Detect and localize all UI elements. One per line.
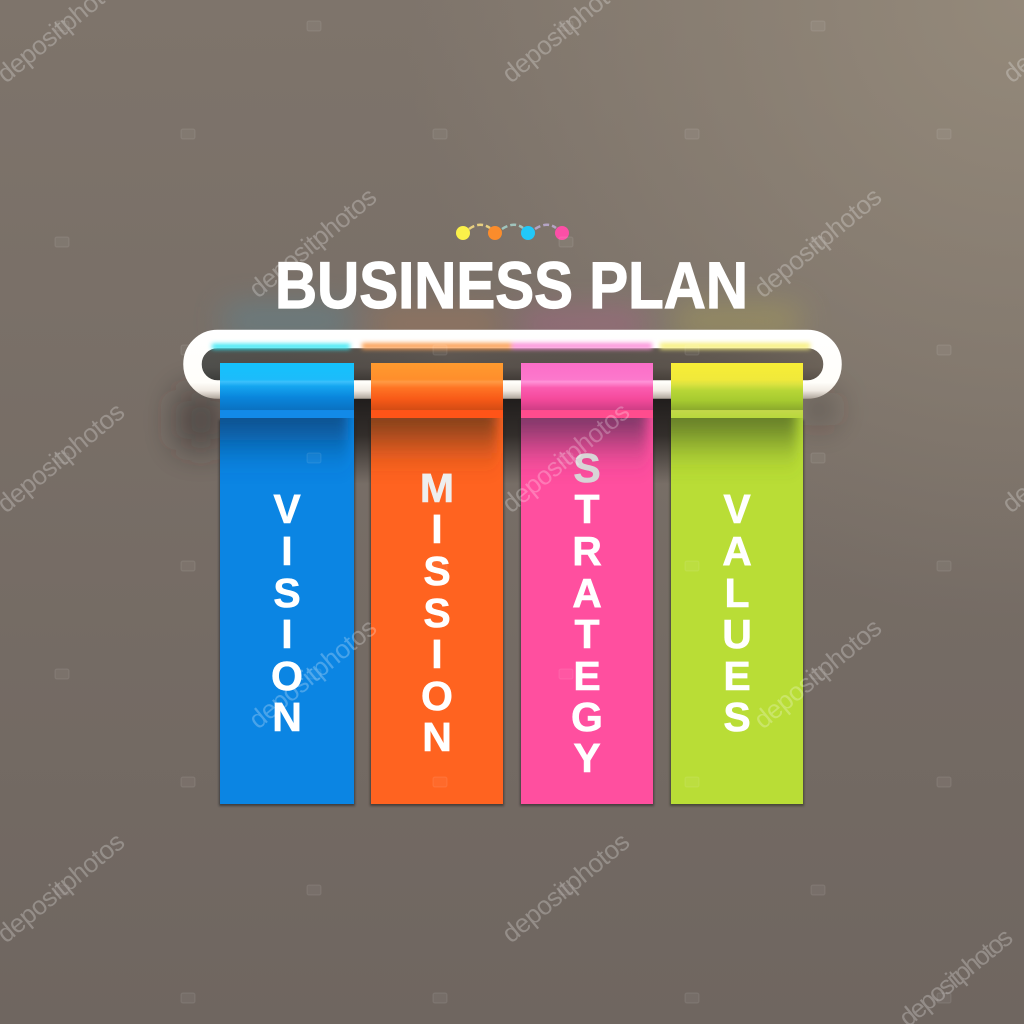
label: strategy: E — [573, 653, 601, 699]
ribbon: vision — [218, 363, 356, 808]
label: values: A — [722, 528, 752, 574]
depositphotos watermarks: depositphotos — [748, 612, 887, 735]
label: strategy — [571, 445, 603, 781]
label: mission: S — [423, 548, 451, 594]
label: vision: S — [273, 570, 301, 616]
label: mission: I — [431, 506, 443, 552]
label: values — [722, 486, 752, 740]
label: strategy: T — [574, 486, 600, 532]
label: values: S — [723, 694, 751, 740]
decorative coloured dots — [456, 225, 569, 240]
white rounded rail — [192, 339, 832, 390]
coloured glow above rail — [225, 306, 800, 336]
label: strategy: A — [572, 570, 602, 616]
label: mission: I — [431, 631, 443, 677]
rail inner opening — [198, 344, 827, 386]
label: strategy: R — [572, 528, 602, 574]
depositphotos watermarks: depositphotos — [243, 612, 382, 735]
ribbon: strategy — [518, 363, 656, 807]
label: mission: S — [423, 590, 451, 636]
label: mission — [420, 465, 454, 760]
label: vision: N — [272, 694, 302, 740]
depositphotos watermarks: depositphotos — [496, 396, 635, 519]
label: values: U — [722, 611, 752, 657]
shadows between ribbons — [354, 396, 671, 484]
label: mission: O — [421, 673, 453, 719]
label: mission: M — [420, 465, 454, 511]
ribbon: values — [669, 363, 805, 807]
label: values: V — [723, 486, 751, 532]
depositphotos watermarks: depositphotos — [748, 181, 887, 304]
depositphotos watermarks: depositphotos — [243, 181, 382, 304]
label: values: E — [723, 653, 751, 699]
label: strategy: Y — [573, 735, 601, 781]
label: vision: I — [281, 611, 293, 657]
label: mission: N — [422, 714, 452, 760]
label: values: L — [724, 570, 750, 616]
title: BUSINESS PLAN — [275, 248, 748, 322]
ribbon: mission — [368, 363, 506, 807]
label: strategy: S — [573, 445, 601, 491]
label: vision: I — [281, 528, 293, 574]
depositphotos watermarks: depositphotos — [496, 826, 635, 949]
label: strategy: G — [571, 694, 603, 740]
label: vision: V — [273, 486, 301, 532]
rail colour reflections — [212, 343, 810, 349]
label: strategy: T — [574, 611, 600, 657]
rail drop shadows — [176, 390, 835, 450]
label: vision: O — [271, 653, 303, 699]
label: vision — [271, 486, 303, 740]
